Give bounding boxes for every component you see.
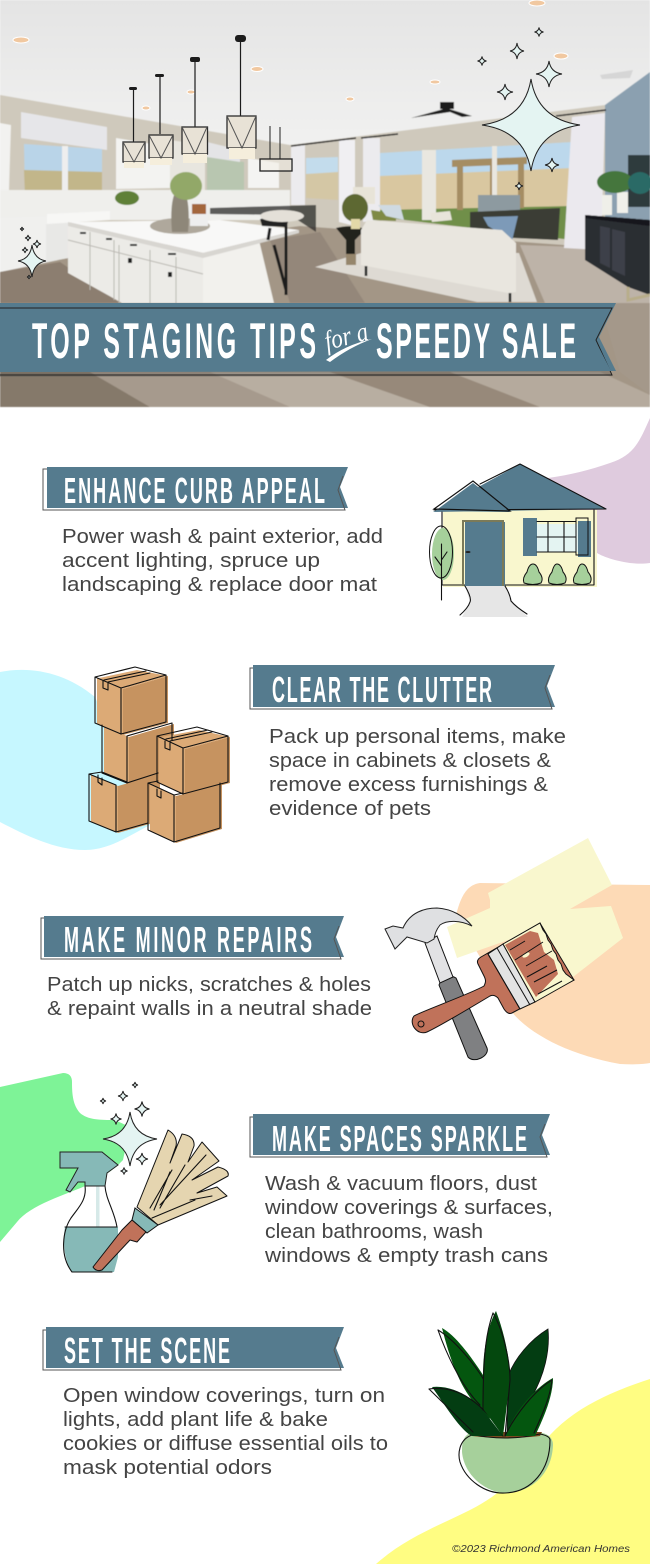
section 2 text: remove excess furnishings &: [269, 774, 549, 796]
section 1 text: landscaping & replace door mat: [62, 574, 377, 596]
section 5 heading: SET THE SCENE: [64, 1331, 230, 1372]
paint strokes: [447, 838, 623, 977]
blob: purple: [548, 418, 650, 564]
copyright: ©2023 Richmond American Homes: [452, 1543, 631, 1555]
section 4 text: [264, 1173, 553, 1267]
section 1 banner: [43, 467, 348, 512]
sparkles: kitchen cabinet: [18, 227, 46, 279]
section 3 heading: MAKE MINOR REPAIRS: [64, 920, 312, 961]
section 1 text: [62, 526, 383, 596]
section 5 text: lights, add plant life & bake: [63, 1409, 328, 1431]
blob: green: [0, 1073, 130, 1242]
icon: house: [430, 464, 607, 617]
icon: potted plant: [429, 1311, 553, 1493]
section 5 text: [63, 1385, 388, 1479]
section 4 text: Wash & vacuum floors, dust: [265, 1173, 537, 1195]
section 4 text: clean bathrooms, wash: [265, 1221, 483, 1243]
section 5 text: mask potential odors: [63, 1457, 272, 1479]
icon: hammer and paintbrush: [385, 908, 574, 1060]
section 2 heading: CLEAR THE CLUTTER: [272, 670, 492, 711]
blob: yellow: [376, 1379, 650, 1564]
title: script connector: for a: [321, 316, 371, 356]
hero photo: staged kitchen and living room: [0, 0, 650, 407]
section 2 banner: [250, 665, 555, 711]
section 1 text: Power wash & paint exterior, add: [62, 526, 383, 548]
title: left part: TOP STAGING TIPS: [32, 314, 316, 369]
section 5 text: Open window coverings, turn on: [63, 1385, 385, 1407]
icon: stacked boxes: [89, 667, 230, 843]
section 5 text: cookies or diffuse essential oils to: [63, 1433, 388, 1455]
sparkles: upper right: [478, 28, 580, 190]
section 4 text: window coverings & surfaces,: [264, 1197, 553, 1219]
section 3 text: [47, 974, 372, 1020]
blob: peach: [456, 883, 650, 1064]
blob: cyan: [0, 670, 150, 850]
section 3 text: & repaint walls in a neutral shade: [47, 998, 372, 1020]
section 2 text: evidence of pets: [269, 798, 431, 820]
title banner: [0, 303, 616, 377]
recessed ceiling lights: [13, 0, 568, 110]
section 2 text: space in cabinets & closets &: [269, 750, 552, 772]
section 2 text: [269, 726, 566, 820]
section 3 banner: [41, 916, 344, 961]
icon: sparkles and spray bottle and duster: [60, 1082, 228, 1272]
section 5 banner: [43, 1327, 344, 1372]
section 3 text: Patch up nicks, scratches & holes: [47, 974, 371, 996]
pendant lights: [123, 35, 292, 171]
section 4 text: windows & empty trash cans: [264, 1245, 548, 1267]
title: right part: SPEEDY SALE: [376, 314, 576, 369]
section 4 heading: MAKE SPACES SPARKLE: [272, 1119, 527, 1160]
section 4 banner: [250, 1114, 550, 1160]
section 1 text: accent lighting, spruce up: [62, 550, 320, 572]
section 1 heading: ENHANCE CURB APPEAL: [64, 471, 325, 512]
section 2 text: Pack up personal items, make: [269, 726, 566, 748]
